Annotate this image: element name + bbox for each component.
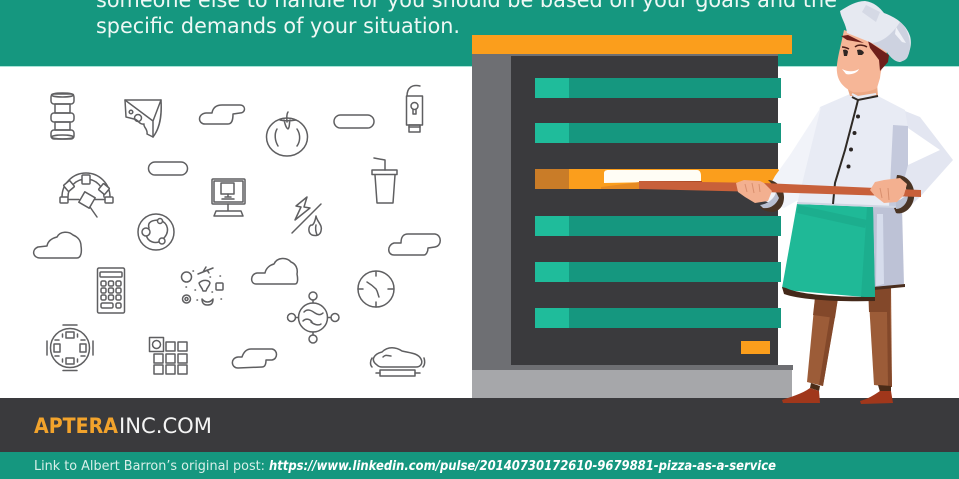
banner text: specific demands of your situation.	[96, 14, 460, 38]
footer teal band	[0, 452, 959, 479]
oven side wall	[472, 54, 778, 366]
neck	[845, 80, 878, 96]
icon: cloud	[200, 105, 244, 124]
icon: cloud pill	[334, 115, 374, 128]
collar and placket	[833, 94, 878, 204]
pizza	[604, 170, 701, 183]
shelf 5	[535, 262, 781, 282]
coat buttons	[846, 114, 860, 168]
torso	[797, 94, 908, 207]
hands	[736, 178, 907, 203]
head	[837, 30, 889, 92]
shelf 1	[535, 78, 781, 98]
brand text: APTERA	[34, 414, 119, 438]
icon: cloud	[232, 349, 276, 368]
shoes	[782, 383, 893, 404]
chef	[639, 1, 953, 404]
torso side shadow	[889, 125, 908, 207]
icon: cloud	[389, 234, 440, 255]
shelf 4	[535, 216, 781, 236]
left arm	[762, 107, 821, 208]
icon: dough on rolling pin	[370, 348, 425, 376]
source link text: https://www.linkedin.com/pulse/20140730172610-9679881-pizza-as-a-service	[269, 459, 776, 474]
icon: drink cup	[372, 158, 397, 203]
icon: orbit circle	[138, 214, 174, 250]
shelf 2	[535, 123, 781, 143]
icon: molecule circle	[288, 292, 339, 343]
icon: tomato	[266, 112, 308, 156]
icon: pillar	[51, 93, 74, 139]
oven	[472, 35, 793, 398]
icon: computer monitor	[212, 179, 245, 216]
doodle icons field	[34, 85, 440, 376]
coat lower panel	[870, 207, 905, 290]
brand text	[34, 414, 212, 438]
icon: scattered ingredients	[182, 267, 223, 305]
shelf 3 glowing with pizza	[535, 169, 780, 189]
icon: cheese	[125, 100, 161, 137]
coat torso and arms	[762, 94, 953, 208]
pizza peel	[639, 181, 921, 197]
icon: arch with keystone	[60, 173, 113, 217]
banner text	[96, 0, 837, 38]
icon: tile grid	[150, 338, 187, 374]
apron	[782, 204, 875, 301]
icon: bolt and flame	[292, 197, 321, 236]
source link text	[34, 459, 776, 474]
top teal banner	[0, 0, 959, 67]
icon: clock	[358, 271, 394, 307]
icon: calculator	[98, 268, 124, 313]
brand text: INC.COM	[119, 414, 212, 438]
footer dark band	[0, 398, 959, 452]
right arm	[890, 105, 953, 208]
icon: lock tag	[406, 85, 422, 132]
icon: cloud	[252, 258, 298, 284]
trousers	[807, 285, 892, 387]
chef hat	[840, 1, 911, 62]
icon: round table	[47, 325, 93, 370]
icon: cloud pill	[148, 162, 188, 175]
shelf 6	[535, 308, 781, 328]
oven top bar	[472, 35, 792, 54]
oven base	[472, 365, 793, 398]
oven indicator	[741, 341, 770, 354]
sleeve cuffs	[760, 175, 914, 213]
source link text: Link to Albert Barron’s original post:	[34, 459, 265, 474]
oven interior	[511, 56, 778, 366]
icon: large cloud	[34, 232, 81, 258]
